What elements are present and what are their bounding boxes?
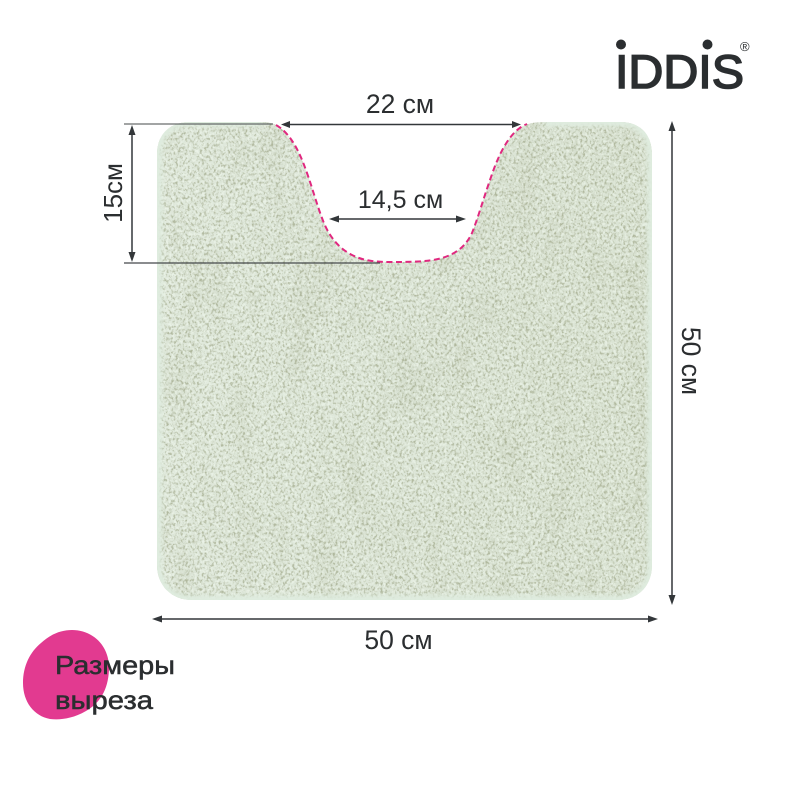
dimension: 50 см width <box>152 616 658 655</box>
dimension: 50 см height: 50 см <box>676 327 706 395</box>
dimension: 15 см <box>98 124 380 263</box>
dimension: 22 см: 22 см <box>366 89 434 119</box>
dimension: 22 см <box>281 89 521 128</box>
logo dot right <box>702 40 712 50</box>
logo: IDDIS <box>615 39 750 98</box>
dimension: 50 см height <box>668 121 706 605</box>
caption text <box>55 650 175 715</box>
dimension: 14,5 см: 14,5 см <box>358 186 443 214</box>
caption with pink blob <box>23 630 175 719</box>
dimension: 14,5 см <box>329 186 466 222</box>
caption text: Размеры <box>55 650 175 680</box>
caption text: выреза <box>55 685 154 715</box>
pink blob <box>23 630 109 719</box>
cut-out dashed outline <box>276 124 527 262</box>
dimension: 15 см: 15см <box>98 163 128 223</box>
dimension: 50 см width: 50 см <box>364 625 433 655</box>
logo registered mark: ® <box>740 39 750 54</box>
bath mat with U-shaped cut-out <box>150 115 660 605</box>
logo wordmark: IDDIS <box>615 45 744 98</box>
logo dot left <box>616 40 626 50</box>
